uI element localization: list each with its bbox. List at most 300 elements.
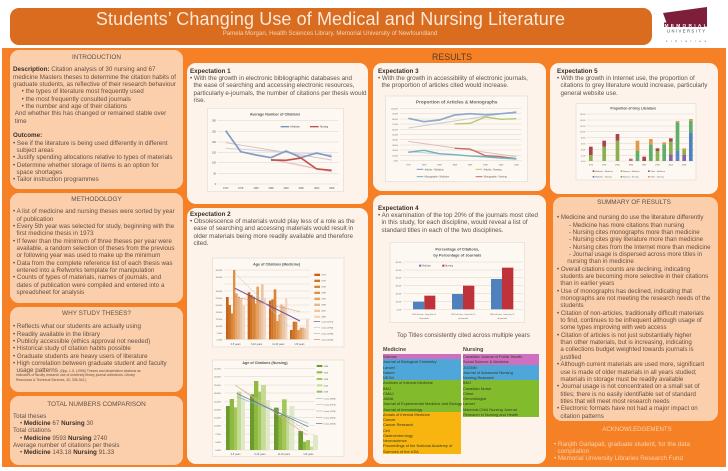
text: summary list: than other materials, but is increasing, indicating (560, 339, 692, 346)
table: nursing top titles (463, 347, 539, 417)
legend: 1993 (321, 299, 327, 301)
text: expectation 4: • An examination of the top 20% of the journals most cited (378, 212, 538, 219)
chart: percentage of citations by percentage of journals (390, 242, 525, 322)
text: expectation 2: older materials being more readily available and therefore (193, 233, 353, 240)
chart: proportion of articles and monographs: 10.0% (392, 155, 398, 157)
text: summary list: • Electronic formats have not had a major impact on (557, 405, 698, 412)
legend: Linear (1973) (321, 321, 333, 324)
text: totals: Average number of citations per thesis (13, 442, 120, 449)
nursing group: green: Research in Nursing and Health (463, 412, 518, 417)
chart: average number of citations: 0 (215, 184, 217, 186)
legend: Linear (1993) (324, 404, 336, 407)
text: reasons list (13, 323, 167, 374)
chart: proportion of grey literature: 2008 (682, 165, 687, 167)
legend: Linear (1998) (324, 410, 336, 413)
chart: proportion of grey literature: 12.0% (580, 126, 586, 128)
text: summary list: • Use of monographs has declined, indicating that (557, 288, 692, 295)
chart: proportion of articles and monographs: 0.0% (393, 161, 398, 163)
medicine group: blue: NEJM (383, 375, 394, 380)
text: expectation 2: ease of searching and accessing materials would result in (193, 225, 353, 232)
chart: percentage of citations by percentage of journals: of journals (497, 317, 507, 320)
chart: average number of citations: 100 (212, 163, 217, 165)
text: methodology list: • Data from the complete reference list of each thesis was (13, 260, 173, 267)
panel: expectation 2 (187, 208, 368, 464)
chart: age of citations nursing (212, 360, 344, 457)
text: expectation 5 (557, 68, 708, 97)
chart: age of citations medicine: 12.50% (216, 319, 223, 321)
chart: average number of citations: 1973 (223, 188, 229, 190)
text: description and outcome: Description: Citation analysis of 30 nursing and 67 (13, 66, 155, 73)
chart: proportion of grey literature: Reports - Nursing (623, 176, 639, 179)
chart: age of citations medicine: 20.00% (216, 305, 223, 307)
chart: percentage of citations by percentage of journals: of journals (458, 317, 468, 320)
chart: proportion of articles and monographs: Articles - Medicine (425, 168, 444, 171)
text: expectation 5: • With the growth in Internet use, the proportion of (557, 75, 695, 82)
medicine group: green: Journal of Immunology (383, 406, 422, 412)
text: methodology list: first medicine thesis in 1973 (16, 230, 94, 237)
medicine group: orange: Cell (383, 428, 390, 432)
chart: proportion of grey literature: 1983 (615, 165, 620, 167)
chart: age of citations medicine (212, 258, 344, 347)
text: summary list: • Overall citations counts are declining, indicating (557, 266, 690, 273)
chart: age of citations medicine: Age of Citations (Medicine) (253, 262, 301, 266)
text: description and outcome (13, 66, 176, 183)
nursing heading: Nursing (463, 347, 483, 353)
nursing group: blue: JOGNN (463, 364, 477, 370)
medicine group: green (383, 380, 461, 412)
bars (226, 270, 309, 339)
text: citation note: Resources & Technical Services, 40, 335-342.) (16, 378, 86, 382)
panel: expectation 1 (187, 63, 368, 204)
legend: 1998 (321, 305, 327, 307)
chart: average number of citations: Nursing (320, 126, 329, 129)
chart: average number of citations: 50 (213, 173, 217, 175)
medicine heading: Medicine (383, 347, 406, 353)
caption: top titles: Top Titles consistently cited across multiple years (397, 332, 530, 338)
text: methodology list: • A list of medicine and nursing theses were sorted by year (13, 208, 175, 215)
legend: 1988 (321, 293, 327, 295)
chart: age of citations nursing: 11-20 years (278, 453, 291, 456)
text: description and outcome: medicine Masters theses to determine the citation habits of (13, 74, 176, 81)
legend: 1978 (321, 281, 327, 283)
heading: why study theses: WHY STUDY THESES? (62, 310, 131, 317)
chart: age of citations nursing: >20 years (303, 453, 314, 456)
chart: age of citations nursing: 5.00% (215, 442, 221, 444)
legend: Linear (1988) (324, 397, 336, 400)
text: expectation 2: Expectation 2 (190, 210, 231, 218)
chart: average number of citations: 1988 (268, 188, 274, 190)
chart: age of citations nursing: 35.00% (214, 385, 221, 387)
chart: age of citations nursing: 10.00% (214, 426, 221, 428)
nursing group: green: Chest (463, 391, 473, 396)
legend: 1988 (324, 366, 329, 368)
chart: proportion of articles and monographs: Monographs - Nursing (484, 176, 507, 179)
chart: proportion of articles and monographs (386, 96, 527, 182)
nursing group: blue: Nursing Research (463, 375, 494, 380)
text: summary list: - Nursing cites from the Internet more than medicine (569, 244, 711, 251)
chart: percentage of citations by percentage of journals: of journals (419, 317, 429, 320)
medicine group: green: CMAJ (383, 391, 394, 396)
chart: proportion of articles and monographs: 1988 (452, 164, 458, 166)
text: summary list: students (560, 302, 584, 309)
medicine group: blue: Nature (383, 370, 395, 375)
chart: average number of citations: 1983 (253, 188, 259, 190)
chart: proportion of grey literature (576, 103, 696, 180)
chart: proportion of grey literature: 1973 (588, 165, 594, 167)
chart: proportion of articles and monographs: 40.0% (392, 140, 398, 142)
text: reasons list: • Graduate students are heavy users of literature (13, 353, 148, 360)
chart: percentage of citations by percentage of journals: 50.0% (396, 270, 402, 272)
chart: average number of citations: 1978 (238, 188, 244, 190)
text: expectation 1: the ease of searching and accessing electronic resources, (193, 82, 354, 89)
title banner (10, 8, 652, 45)
chart: proportion of grey literature: 1988 (628, 165, 634, 167)
medicine group: orange: Proceedings of the National Academy of (383, 443, 452, 448)
text: expectation 5: Expectation 5 (557, 68, 598, 74)
medicine group: purple: Science (383, 354, 397, 359)
medicine group: orange: Cancer Research (383, 422, 413, 427)
medicine group: orange: Cancer (383, 417, 396, 422)
text: methodology list: spreadsheet for analysis (16, 289, 84, 296)
chart: average number of citations: 150 (212, 153, 217, 155)
text: expectation 1 (190, 68, 366, 104)
legend: 1993 (324, 372, 329, 374)
chart: age of citations medicine: 35.00% (216, 277, 223, 279)
text: summary list: • Citation of non-articles, traditionally difficult materials (557, 310, 704, 317)
chart: proportion of articles and monographs: 1998 (483, 164, 488, 166)
table: medicine top titles (383, 347, 462, 454)
medicine group: green: Journal of Experimental Medicine and Biology (383, 401, 462, 406)
medicine group: green: JAMA (383, 396, 393, 401)
legend: 2003 (324, 385, 329, 387)
chart: percentage of citations by percentage of journals: Medicine (422, 266, 432, 268)
chart: proportion of articles and monographs: 2008 (514, 164, 519, 166)
panel: total numbers comparison (10, 396, 183, 465)
nursing group: green: Gerontologist (463, 396, 486, 401)
chart: age of citations medicine: 25.00% (216, 298, 223, 300)
chart: average number of citations: 2008 (329, 188, 335, 190)
medicine group: purple (383, 354, 461, 359)
text: summary list: • Journal usage is not concentrated on a small set of (557, 383, 699, 390)
text: expectation 2 (190, 210, 355, 247)
panel: expectation 3 (373, 63, 546, 191)
chart: proportion of grey literature: Other - Nursing (650, 176, 664, 179)
text: expectation 1: rise. (193, 97, 205, 104)
chart: proportion of articles and monographs: 50.0% (392, 134, 398, 136)
chart: proportion of articles and monographs: 30.0% (392, 145, 398, 147)
text: summary list: - Nursing cites grey literature more than medicine (569, 236, 703, 243)
chart: age of citations medicine: 15.00% (216, 312, 223, 314)
text: expectation 3: Expectation 3 (378, 68, 419, 74)
text: methodology list: available, a random selection of theses from the previous (16, 245, 175, 252)
logo: Memorial University (663, 7, 707, 43)
text: expectation 1: • With the growth in electronic bibliographic databases and (190, 75, 352, 82)
chart: age of citations medicine: 5.00% (217, 333, 223, 335)
chart: proportion of grey literature: 6.0% (581, 144, 586, 146)
chart: age of citations nursing: Age of Citations (Nursing) (242, 361, 288, 365)
logo: Memorial University: UNIVERSITY (667, 28, 705, 34)
chart: proportion of articles and monographs: 1993 (468, 164, 473, 166)
text: totals: • Medicine 67 Nursing 30 (20, 420, 93, 427)
text: summary list: monographs are not meeting the research needs of the (560, 295, 710, 302)
chart: average number of citations: 2003 (314, 188, 320, 190)
text: summary list: a collections budget weighted towards journals is (560, 346, 694, 353)
chart: proportion of grey literature: 1993 (642, 165, 647, 167)
text: totals: Total citations (13, 427, 51, 434)
text: description and outcome: Outcome: (13, 132, 42, 139)
legend: Linear (1983) (321, 327, 333, 330)
logo: Memorial University: Libraries (666, 39, 706, 43)
text: description and outcome: • Tailor instruction programmes (13, 176, 99, 183)
text: summary list: titles that will meet most research needs (560, 398, 670, 405)
chart: proportion of articles and monographs: 70.0% (392, 124, 398, 126)
text: summary list: - Nursing cites monographs more than medicine (569, 229, 700, 236)
chart: proportion of articles and monographs: 90.0% (392, 114, 398, 116)
chart: proportion of articles and monographs: 1973 (406, 164, 411, 166)
chart: proportion of grey literature: Websites - Nursing (595, 176, 612, 179)
text: reasons list: usage patterns (Zipp, L.S. (1996) Theses and dissertation citations as (16, 367, 141, 374)
text: methodology list: entered into a Refworks template for manipulation (16, 267, 154, 274)
text: summary list: students are becoming more selective in their citations (560, 273, 708, 280)
nursing group: blue (463, 364, 539, 380)
chart: proportion of articles and monographs: 80.0% (392, 119, 398, 121)
text: summary list: • Medicine and nursing do use the literature differently (557, 214, 703, 221)
chart: percentage of citations by percentage of journals: 50% of cites , from this % (412, 313, 436, 316)
panel: expectation 4 (373, 195, 546, 464)
text: methodology list: • If fewer than the minimum of three theses per year were (13, 238, 172, 245)
logo: Memorial University: MEMORIAL (664, 23, 707, 29)
legend: 1983 (321, 287, 327, 289)
nursing group: green: BMJ (463, 380, 471, 385)
medicine group: blue: Lancet (383, 364, 395, 370)
chart: proportion of articles and monographs: 1983 (437, 164, 442, 166)
medicine group: orange (383, 412, 461, 454)
chart: age of citations medicine: 0-5 years (231, 343, 241, 346)
nursing group: green: Maternal-Child Nursing Journal (463, 406, 517, 412)
chart: age of citations medicine: 6-10 years (251, 343, 263, 346)
text: methodology list: or following year was used to make up the minimum (16, 252, 160, 259)
text: reasons list: • Readily available in the library (13, 331, 100, 338)
chart: percentage of citations by percentage of journals: 30.0% (396, 286, 402, 288)
medicine group: orange: Neuroscience (383, 438, 407, 443)
text: expectation 2: • Obsolescence of materials would play less of a role as the (190, 218, 355, 225)
text: acknowledgements: • Memorial University Libraries Research Fund (554, 455, 683, 462)
panel: introduction (10, 50, 183, 189)
chart: average number of citations: 250 (212, 131, 217, 133)
chart: average number of citations (207, 108, 343, 192)
text: description and outcome: • Justify spending allocations relative to types of materials (13, 154, 173, 161)
text: description and outcome: subject areas (16, 147, 54, 154)
text: description and outcome: • See if the literature is being used differently in different (13, 140, 167, 147)
text: summary list (557, 214, 711, 420)
chart: proportion of articles and monographs: 100.0% (391, 109, 398, 111)
chart: average number of citations: 1993 (283, 188, 289, 190)
text: expectation 1: particularly e-journals, the number of citations per thesis would (193, 90, 366, 97)
chart: proportion of grey literature: 8.0% (581, 138, 586, 140)
nursing group: blue: Journal of Advanced Nursing (463, 370, 513, 375)
text: summary list: - Journal usage is dispersed across more titles in (569, 251, 702, 258)
legend (316, 365, 336, 426)
text: acknowledgements: • Ranjith Garlapati, graduate student, for the data (554, 440, 690, 448)
chart: proportion of articles and monographs: 20.0% (392, 150, 398, 152)
text: acknowledgements (554, 440, 690, 462)
legend: 2008 (324, 392, 329, 394)
nursing group: purple: Canadian Journal of Public Health (463, 354, 522, 359)
text: summary list: citation patterns (560, 413, 604, 420)
medicine group: green: BMJ (383, 386, 391, 390)
chart: age of citations nursing: 40.00% (214, 377, 221, 379)
chart: proportion of articles and monographs: 60.0% (392, 129, 398, 131)
chart: percentage of citations by percentage of journals: 0.0% (397, 309, 402, 311)
text: totals: • Medicine 143.18 Nursing 91.33 (20, 449, 114, 456)
text: summary list: • Although current materials are used more, significant (557, 361, 704, 368)
legend: 2008 (321, 317, 327, 319)
chart: age of citations nursing: 25.00% (214, 401, 221, 403)
chart: age of citations medicine: 40.00% (216, 270, 223, 272)
chart: proportion of grey literature: 14.0% (580, 120, 586, 122)
chart: proportion of grey literature: 2.0% (581, 155, 586, 157)
heading: total numbers comparison: TOTAL NUMBERS COMPARISON (47, 401, 146, 408)
heading: methodology: METHODOLOGY (71, 196, 122, 203)
legend: 1998 (324, 379, 329, 381)
text: summary list: materials in storage must be readily available (560, 376, 683, 383)
chart: percentage of citations by percentage of journals: Percentage of Citations, (435, 247, 479, 251)
text: methodology list: • Every 5th year was selected for study, beginning with the (13, 223, 174, 230)
panel: why study theses (10, 307, 183, 392)
subtitle: Pamela Morgan, Health Sciences Library, Memorial University of Newfoundland (223, 30, 437, 37)
text: expectation 3: • With the growth in accessibility of electronic journals, (378, 75, 528, 82)
chart: age of citations nursing: 6-10 years (254, 453, 266, 456)
nursing group: green: Canadian Nurse (463, 386, 491, 390)
text: methodology list: • Counts of types of materials, names of journals, and (13, 274, 161, 281)
chart: percentage of citations by percentage of journals: Nursing (445, 265, 454, 268)
chart: age of citations nursing: 20.00% (214, 409, 221, 411)
chart: age of citations nursing: 45.00% (214, 368, 221, 370)
text: methodology list: dates of publication were compiled and entered into a (16, 282, 164, 289)
chart: percentage of citations by percentage of journals: 40.0% (396, 278, 402, 280)
text: description and outcome: • the types of literature most frequently used (22, 88, 144, 95)
bars (413, 268, 513, 309)
medicine group: green: Archives of Internal Medicine (383, 380, 433, 385)
text: methodology list (13, 208, 175, 296)
chart: percentage of citations by percentage of journals: by Percentage of Journals (433, 254, 481, 258)
chart: proportion of articles and monographs: Proportion of Articles & Monographs (416, 100, 498, 105)
text: reasons list: • Reflects what our students are actually using (13, 323, 141, 330)
chart: percentage of citations by percentage of journals: 60.0% (396, 262, 402, 264)
chart: proportion of grey literature: Websites - Medicine (595, 170, 614, 173)
legend: Linear (2008) (324, 423, 336, 426)
chart: percentage of citations by percentage of journals: 80% of cites , from this % (490, 313, 514, 316)
chart: age of citations nursing: 0.00% (215, 450, 221, 452)
bars (226, 381, 318, 450)
text: description and outcome: And whether this has changed or remained stable over (15, 110, 166, 117)
heading: introduction: INTRODUCTION (72, 54, 121, 61)
chart: average number of citations: Average Number of Citations (250, 113, 300, 117)
medicine group: orange: Gastroenterology (383, 433, 413, 438)
text: summary list: some types improving with web access (560, 324, 667, 331)
chart: proportion of articles and monographs: Articles - Nursing (484, 168, 502, 171)
chart: average number of citations: 200 (212, 142, 217, 144)
text: description and outcome: • the most frequently consulted journals (22, 96, 131, 103)
text: description and outcome: graduate students, as reflective of their research behaviour (13, 81, 176, 88)
text: expectation 4: in this study, for each discipline, would reveal a list of (381, 219, 528, 226)
chart: percentage of citations by percentage of journals: 20.0% (396, 294, 402, 296)
chart: proportion of grey literature: Reports - Medicine (623, 170, 641, 173)
stacked bars (589, 119, 693, 161)
chart: proportion of grey literature: 0.0% (581, 161, 586, 163)
text: totals: • Medicine 9593 Nursing 2740 (20, 435, 107, 442)
chart: proportion of articles and monographs: 2003 (499, 164, 504, 166)
legend (314, 274, 333, 342)
text: summary list: nursing than in medicine (567, 258, 634, 265)
chart: proportion of articles and monographs: 1978 (422, 164, 427, 166)
results heading: RESULTS (432, 52, 472, 62)
chart: age of citations nursing: 0-5 years (231, 453, 241, 456)
chart: proportion of articles and monographs: Monographs - Medicine (425, 176, 450, 179)
legend: Linear (1998) (321, 333, 333, 336)
chart: percentage of citations by percentage of journals: 65% of cites , from this % (451, 313, 475, 316)
chart: percentage of citations by percentage of journals: 10.0% (396, 302, 402, 304)
text: summary list: • Citation of articles is not just substantially higher (557, 332, 692, 339)
text: summary list: titles; there is no easily identifiable set of standard (560, 391, 696, 398)
chart: average number of citations: 300 (212, 121, 217, 123)
chart: age of citations nursing: 7.50% (215, 434, 221, 436)
text: description and outcome: • Determine whether storage of items is an option for (13, 162, 159, 169)
text: citation note: indicators of faculty research use of university library journal collections. Library (16, 373, 135, 377)
text: summary list: justified (560, 354, 581, 361)
text: expectation 4 (378, 204, 538, 234)
heading: summary of results: SUMMARY OF RESULTS (597, 199, 671, 206)
panel: expectation 5 (550, 63, 718, 194)
medicine group: blue: Journal of Biological Chemistry (383, 359, 436, 364)
chart: proportion of grey literature: 16.0% (580, 114, 586, 116)
chart: proportion of grey literature: 4.0% (581, 149, 586, 151)
text: expectation 5: general website use. (560, 90, 618, 97)
nursing group: green: Lancet (463, 401, 475, 406)
text: summary list: to find, continues to be infrequent although usage of (560, 317, 702, 324)
chart: age of citations nursing: 30.00% (214, 393, 221, 395)
chart: proportion of grey literature: 2003 (668, 165, 674, 167)
text: citation note (16, 373, 135, 382)
nursing group: green (463, 380, 539, 417)
title: Students’ Changing Use of Medical and Nursing Literature (96, 9, 565, 29)
nursing group: purple: Social Science & Medicine (463, 359, 509, 364)
text: expectation 2: cited. (193, 240, 208, 247)
legend: Linear (2003) (324, 416, 336, 419)
medicine group: orange: Sciences of the USA (383, 448, 419, 454)
panel: summary of results (553, 197, 718, 421)
medicine group: blue (383, 359, 461, 380)
text: expectation 3: the proportion of articles cited would increase. (381, 82, 509, 89)
text: reasons list: • High correlation between graduate student and faculty (13, 360, 167, 367)
text: acknowledgements: compilation (557, 448, 589, 455)
text: totals: Total theses (13, 412, 46, 420)
chart: proportion of grey literature: 10.0% (580, 132, 586, 134)
legend: Linear (2008) (321, 339, 333, 342)
medicine group: orange: Annals of Internal Medicine (383, 412, 430, 417)
chart: age of citations medicine: >20 years (294, 343, 305, 346)
text: expectation 4: standard titles in each of the two disciplines. (381, 227, 503, 234)
text: expectation 5: citations to grey literature would increase, particularly (560, 82, 707, 89)
chart: age of citations medicine: 0.00% (217, 339, 223, 341)
chart: age of citations nursing: 15.00% (214, 418, 221, 420)
text: summary list: - Medicine has more citations than nursing (569, 222, 684, 229)
legend: 1973 (321, 275, 327, 277)
chart: age of citations medicine: 11-20 years (272, 343, 285, 346)
text: summary list: than in earlier years (560, 280, 614, 287)
text: expectation 4: Expectation 4 (378, 204, 419, 212)
text: expectation 1: Expectation 1 (190, 68, 231, 74)
